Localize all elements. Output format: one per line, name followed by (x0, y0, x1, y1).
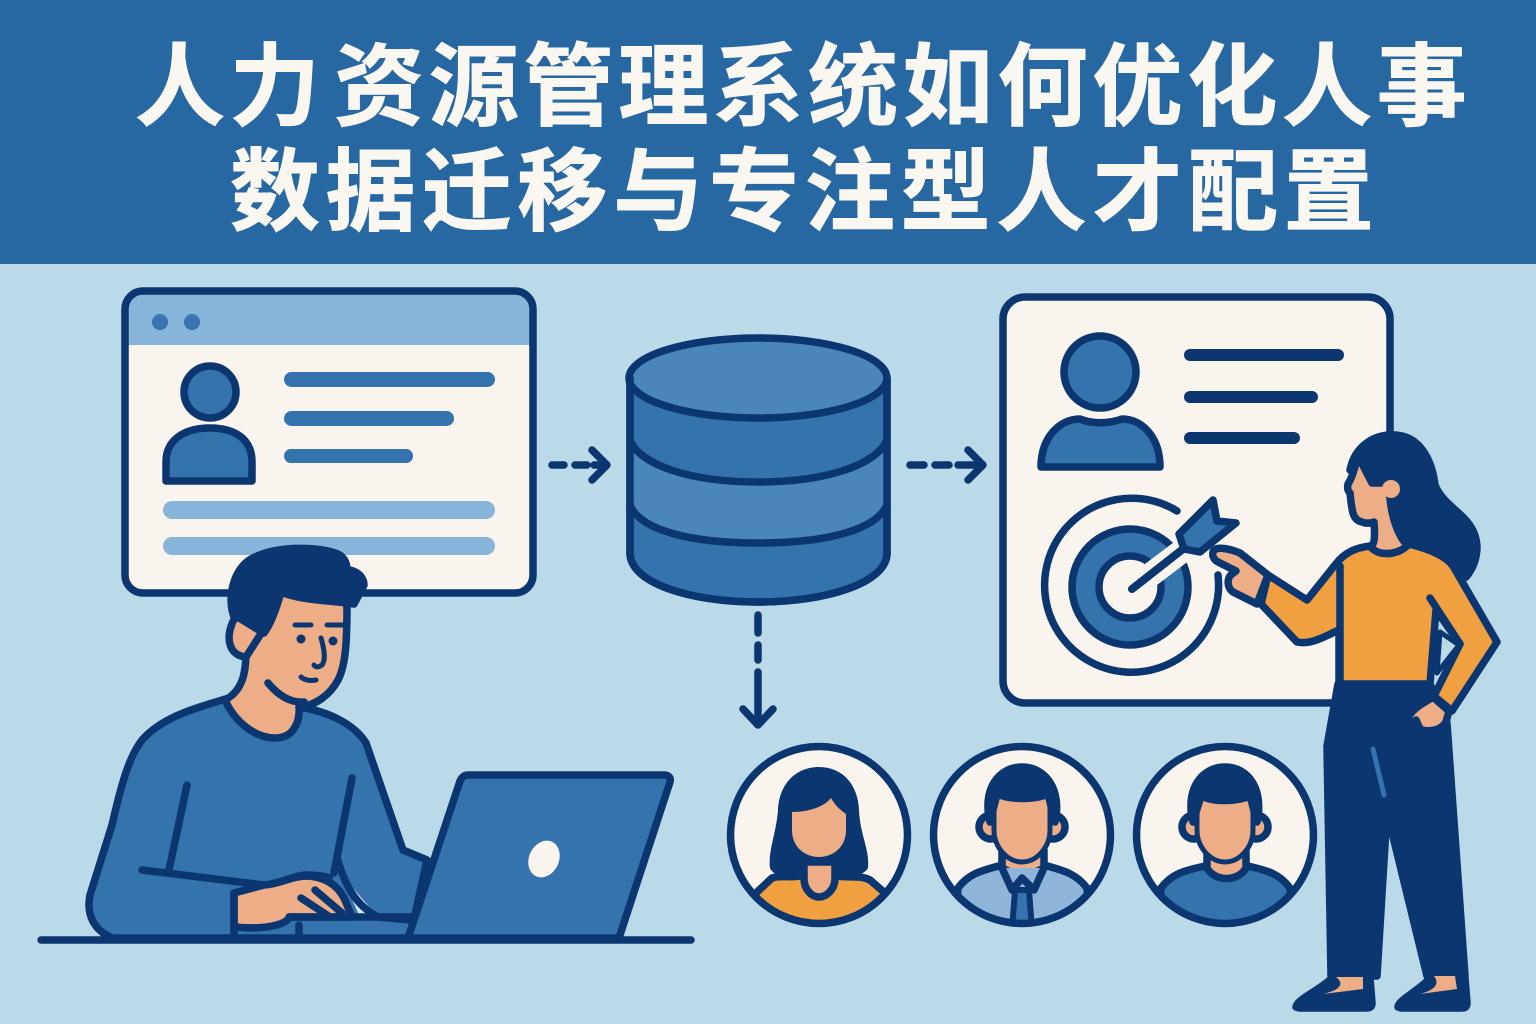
woman other hand (1407, 697, 1449, 731)
arrow: database to people (743, 615, 773, 725)
woman hair (1350, 435, 1477, 577)
arrow: window to database (552, 450, 607, 480)
woman shoes (1296, 978, 1372, 1008)
arrow: database to talent card (910, 450, 983, 480)
person: woman pointing (1213, 435, 1497, 1008)
avatar: man in sweater (1136, 746, 1314, 930)
woman sweater (1261, 544, 1497, 711)
title banner (0, 0, 1536, 264)
title banner: 数据迁移与专注型人才配置 (230, 143, 1380, 243)
icon: target with arrow (1045, 498, 1236, 672)
title banner: 人力 (135, 38, 325, 138)
man hand (234, 876, 352, 928)
woman pants (1327, 684, 1465, 976)
desk line (41, 936, 691, 944)
woman pointing hand (1213, 548, 1268, 604)
icon: laptop (408, 775, 670, 938)
man hair (231, 548, 364, 633)
person: man at laptop (89, 548, 427, 938)
woman neck and face (1348, 456, 1408, 554)
man arm lines (142, 778, 352, 885)
avatar: woman (730, 746, 908, 930)
man ear (229, 616, 262, 657)
avatar: man in shirt and tie (934, 746, 1110, 930)
man body (89, 699, 427, 938)
panel: talent profile card (1003, 297, 1390, 703)
man neck and face (225, 592, 347, 738)
panel: source HR system window (125, 291, 533, 593)
icon: database (629, 338, 887, 602)
title banner: 资源管理系统如何优化人事 (334, 38, 1472, 138)
